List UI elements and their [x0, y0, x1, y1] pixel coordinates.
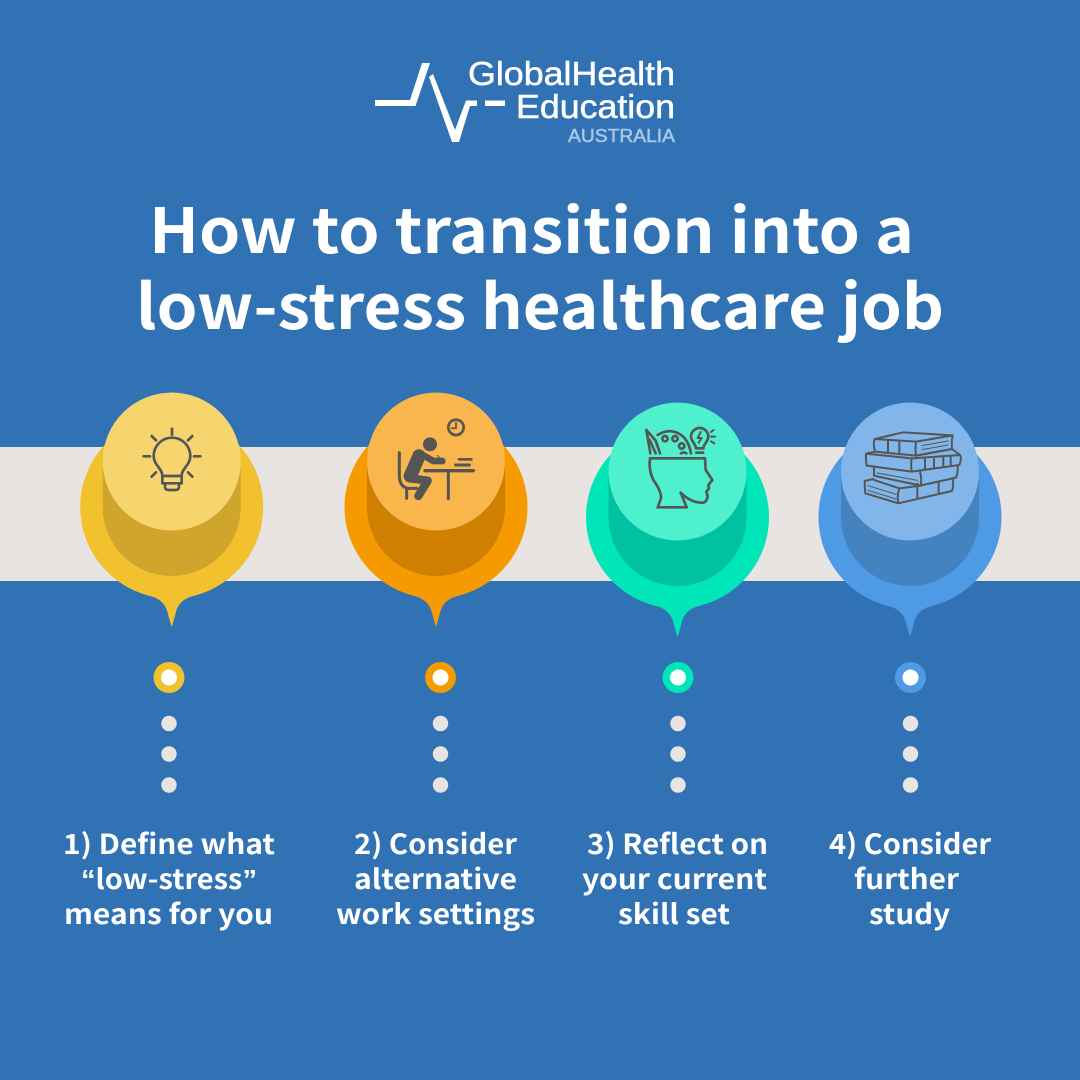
marker 1	[154, 662, 184, 793]
step 1 label: means for you	[64, 892, 273, 932]
step 2 label: 2) Consider	[354, 822, 518, 862]
pin 3: green	[586, 402, 769, 637]
logo	[375, 55, 675, 146]
logo: AUSTRALIA	[568, 126, 675, 146]
icon: light bulb	[144, 429, 200, 490]
pin 2: orange	[344, 392, 528, 627]
step 1 label: 1) Define what	[63, 822, 275, 862]
pin 4: blue	[818, 402, 1002, 637]
step 3 label	[582, 822, 768, 932]
title: How to transition into a	[149, 181, 914, 271]
step 4 label: further	[854, 857, 960, 897]
step 4 label: study	[869, 892, 950, 932]
step 1 label	[63, 822, 275, 932]
pin 1: yellow	[80, 392, 263, 627]
icon: stack of books	[865, 432, 961, 503]
step 2 label: work settings	[336, 892, 535, 932]
step 1 label: “low-stress ”	[81, 857, 257, 897]
logo: GlobalHealth	[468, 55, 675, 92]
background band	[0, 447, 1080, 581]
marker 4	[895, 662, 926, 793]
step 3 label: your current	[582, 857, 767, 897]
step 4 label	[829, 822, 992, 932]
step 2 label	[336, 822, 535, 932]
step 3 label: skill set	[618, 892, 730, 932]
step 3 label: 3) Reflect on	[587, 822, 768, 862]
step 2 label: alternative	[354, 857, 517, 897]
title: low-stress healthcare job	[136, 257, 944, 347]
icon: person at desk	[399, 420, 473, 499]
icon: head with ideas	[646, 428, 715, 507]
marker 3	[662, 662, 694, 793]
title	[136, 181, 944, 347]
marker 2	[425, 662, 456, 793]
logo: Education	[516, 88, 675, 125]
step 4 label: 4) Consider	[829, 822, 992, 862]
